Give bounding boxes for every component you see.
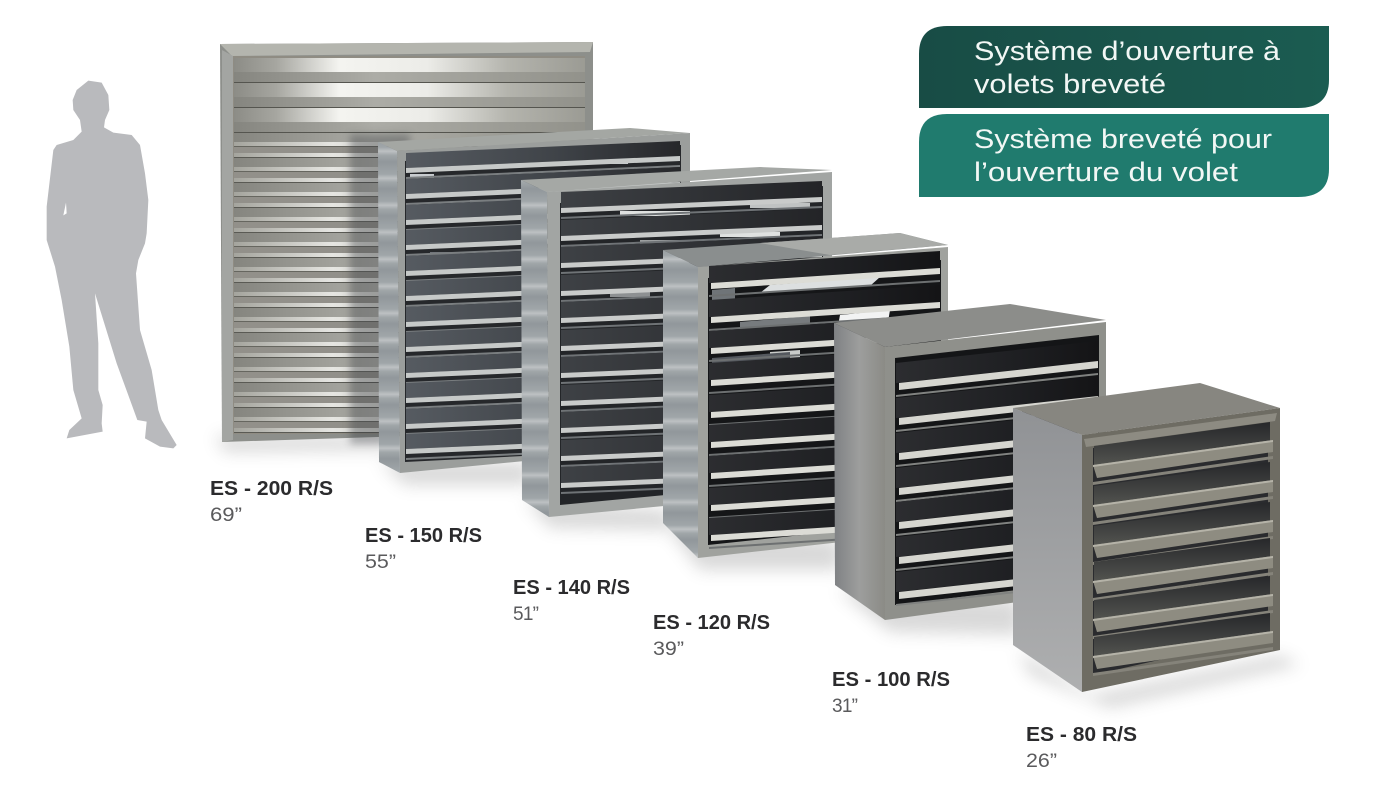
label: ES-150 bbox=[365, 525, 482, 573]
label: ES-150: 55” bbox=[365, 552, 396, 573]
callout: teal patented system bbox=[919, 114, 1329, 197]
label: ES-140: ES - 140 R/S bbox=[513, 577, 630, 599]
louvers bbox=[709, 251, 940, 549]
label: ES-150: ES - 150 R/S bbox=[365, 525, 482, 547]
product: ES-200 R/S unit bbox=[220, 42, 593, 444]
fan flecks bbox=[712, 277, 890, 368]
label: ES-80 bbox=[1026, 724, 1137, 772]
label: ES-80: ES - 80 R/S bbox=[1026, 724, 1137, 746]
label: ES-100: 31” bbox=[832, 696, 858, 717]
label: ES-120 bbox=[653, 612, 770, 660]
label: ES-200: ES - 200 R/S bbox=[210, 478, 333, 500]
label: ES-140 bbox=[513, 577, 630, 625]
callout: teal patented system: l’ouverture du volet bbox=[974, 157, 1239, 187]
floor shadows bbox=[215, 436, 1300, 708]
label: ES-120: 39” bbox=[653, 639, 684, 660]
label: ES-140: 51” bbox=[513, 604, 539, 625]
callout: green patented shutter system bbox=[919, 26, 1329, 108]
upper louvers bbox=[234, 58, 585, 133]
fan flecks bbox=[610, 203, 810, 297]
cast shadow on unit bbox=[350, 134, 410, 444]
product: ES-140 R/S unit bbox=[521, 167, 832, 517]
louvers bbox=[1093, 422, 1273, 676]
louvers bbox=[561, 181, 822, 494]
callout: green patented shutter system: volets breveté bbox=[974, 69, 1166, 99]
callout: teal patented system: Système breveté pour bbox=[974, 124, 1272, 154]
label: ES-200 bbox=[210, 478, 333, 526]
louvers bbox=[896, 341, 1098, 606]
product: ES-80 R/S unit bbox=[1013, 383, 1280, 692]
label: ES-120: ES - 120 R/S bbox=[653, 612, 770, 634]
label: ES-100: ES - 100 R/S bbox=[832, 669, 950, 691]
icon: human silhouette for scale bbox=[47, 81, 177, 448]
product: ES-150 R/S unit bbox=[378, 128, 690, 473]
louvers bbox=[406, 141, 680, 460]
product: ES-100 R/S unit bbox=[834, 304, 1106, 620]
label: ES-80: 26” bbox=[1026, 751, 1057, 772]
label: ES-200: 69” bbox=[210, 505, 242, 526]
fan flecks bbox=[410, 160, 628, 334]
lower louvers bbox=[234, 133, 585, 433]
product: ES-120 R/S unit bbox=[663, 233, 948, 558]
callout: green patented shutter system: Système d’ouverture à bbox=[974, 36, 1281, 66]
label: ES-100 bbox=[832, 669, 950, 717]
